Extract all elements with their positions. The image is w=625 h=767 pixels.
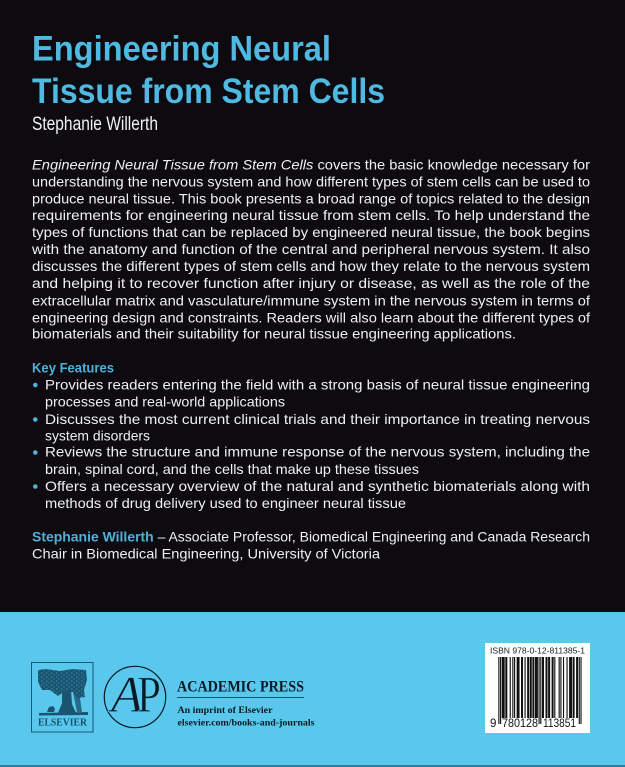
text block: description: requirements for engineering neural tissue from stem cells. To help understand the — [32, 207, 590, 223]
bullet item 3: brain, spinal cord, and the cells that make up these tissues — [45, 461, 419, 477]
ISBN text: ISBN 978-0-12-811385-1 — [490, 646, 585, 656]
barcode digits — [490, 718, 576, 730]
text block: description: types of functions that can be replaced by engineered neural tissue, the book begins — [32, 224, 590, 240]
bullet item 2: system disorders — [45, 428, 150, 444]
text block: description: discusses the different types of stem cells and how they relate to the nervous system — [32, 258, 590, 274]
text block: description: extracellular matrix and vasculature/immune system in the nervous system in terms of — [32, 293, 590, 309]
text block: description: biomaterials and their suitability for neural tissue engineering applications. — [32, 326, 516, 342]
text block: description: with the anatomy and function of the central and peripheral nervous system. It also — [31, 241, 590, 257]
barcode digits: 113851 — [543, 718, 576, 730]
text block: description: and helping it to recover function after injury or disease, as well as the role of the — [32, 275, 590, 291]
text block: description: Engineering Neural Tissue from Stem Cells covers the basic knowledge necessary for — [32, 156, 590, 172]
text block: description: engineering design and constraints. Readers will also learn about the different types of — [32, 309, 590, 325]
author name: Stephanie Willerth — [32, 114, 158, 135]
text block: description: produce neural tissue. This book presents a broad range of topics related to the design — [32, 190, 590, 206]
bullet item 3: Reviews the structure and immune response of the nervous system, including the — [45, 444, 590, 460]
icon: AP circle logo: A — [108, 667, 143, 724]
barcode — [485, 643, 590, 733]
list: key features bullets — [33, 376, 590, 511]
heading: key features: Key Features — [32, 360, 114, 376]
bullet item 2: Discusses the most current clinical trials and their importance in treating nervous — [45, 411, 590, 427]
text block: author biography — [32, 529, 590, 562]
bullet item 1 — [33, 376, 590, 410]
title — [32, 30, 385, 111]
bullet item 4: Offers a necessary overview of the natural and synthetic biomaterials along with — [45, 478, 590, 494]
icon: tree — [38, 669, 88, 716]
barcode digits: 9 — [490, 718, 496, 730]
title: Engineering Neural — [32, 30, 331, 68]
barcode digits: 780128 — [502, 718, 538, 730]
bullet item 3 — [33, 444, 590, 477]
panel: dark upper background — [0, 0, 625, 612]
publisher name — [177, 679, 315, 728]
text block: description — [31, 156, 590, 342]
publisher name: An imprint of Elsevier — [178, 706, 273, 716]
text block: author biography: Chair in Biomedical Engineering, University of Victoria — [32, 546, 380, 562]
barcode bars — [498, 657, 582, 724]
icon: Elsevier logo — [32, 662, 93, 732]
publisher name: ACADEMIC PRESS — [177, 679, 304, 696]
publisher name: elsevier.com/books-and-journals — [178, 718, 315, 728]
bullet item 1: processes and real-world applications — [45, 394, 285, 410]
logo wordmark: ELSEVIER — [38, 716, 88, 728]
bullet item 2 — [33, 411, 590, 444]
bullet item 4 — [33, 478, 590, 511]
bullet item 4: methods of drug delivery used to engineer neural tissue — [45, 495, 406, 511]
panel: blue footer band — [0, 612, 625, 767]
text block: author biography: Stephanie Willerth – Associate Professor, Biomedical Engineering and Canada Research — [32, 529, 590, 545]
icon: AP circle logo — [104, 666, 166, 728]
title: Tissue from Stem Cells — [32, 72, 385, 111]
bullet item 1: Provides readers entering the field with a strong basis of neural tissue engineering — [45, 376, 590, 392]
text block: description: understanding the nervous system and how different types of stem cells can be used to — [32, 174, 590, 190]
icon: AP circle logo: P — [137, 667, 161, 724]
